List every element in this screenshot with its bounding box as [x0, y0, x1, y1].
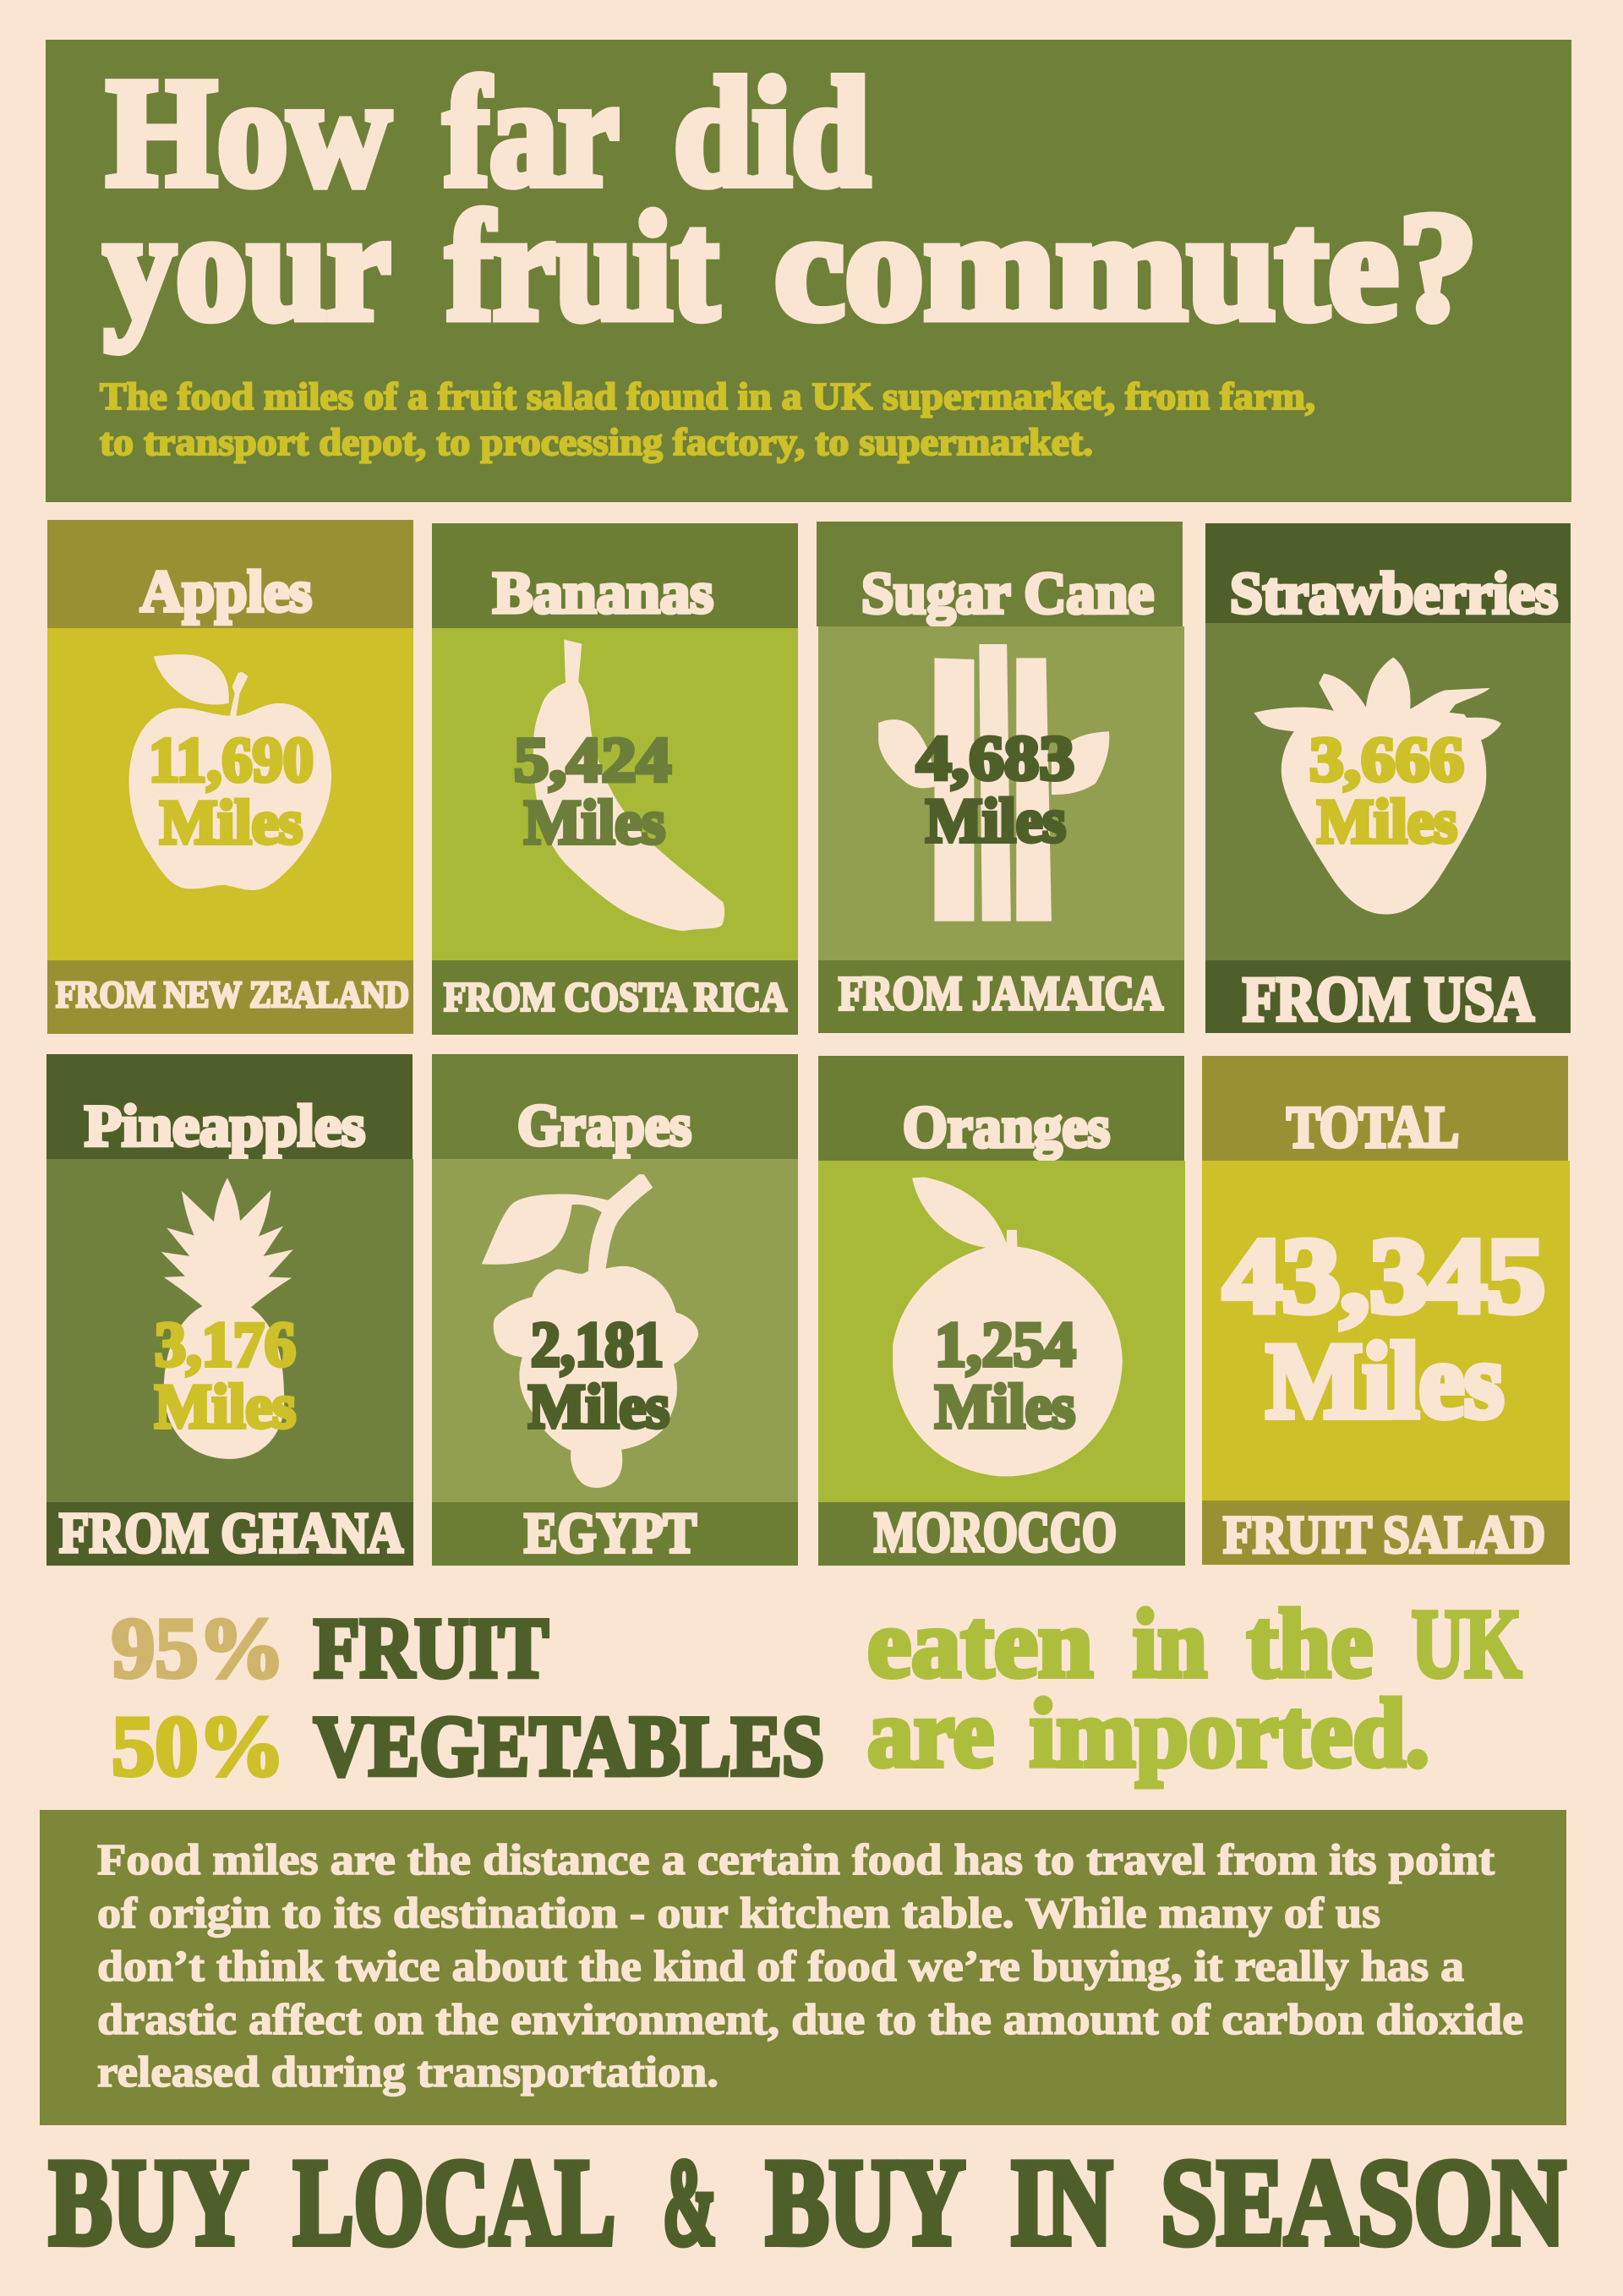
subtitle	[100, 374, 1315, 463]
oranges origin: MOROCCO	[874, 1500, 1117, 1564]
icon: apple	[129, 654, 331, 890]
subtitle: to transport depot, to processing factory, to supermarket.	[100, 420, 1093, 463]
sugar cane heading: Sugar Cane	[861, 561, 1154, 626]
pineapples origin band	[46, 1502, 413, 1566]
strawberries miles value	[1309, 725, 1464, 857]
call to action: LOCAL	[293, 2134, 615, 2271]
subtitle: The food miles of a fruit salad found in a UK supermarket, from farm,	[100, 374, 1315, 418]
pineapples heading band	[46, 1054, 413, 1159]
total miles value	[1223, 1217, 1545, 1440]
sugar cane origin band	[818, 960, 1184, 1033]
panel: total	[1202, 1056, 1570, 1565]
bananas origin band	[432, 960, 798, 1035]
call to action	[49, 2134, 1566, 2271]
apples origin band	[47, 960, 413, 1034]
bananas heading band	[432, 523, 798, 628]
pineapples heading: Pineapples	[85, 1094, 365, 1159]
bananas origin: FROM COSTA RICA	[444, 974, 788, 1020]
icon: banana	[533, 639, 724, 931]
call to action: IN	[1010, 2134, 1112, 2271]
apples miles value: 11,690	[149, 725, 314, 795]
icon: grapes	[482, 1174, 698, 1488]
strawberries origin band	[1205, 960, 1571, 1033]
grapes heading: Grapes	[517, 1094, 691, 1158]
oranges origin band	[818, 1502, 1185, 1566]
total miles value: 43,345	[1223, 1217, 1545, 1336]
strawberries body	[1205, 623, 1571, 960]
strawberries miles value: Miles	[1317, 788, 1457, 857]
total heading band	[1202, 1056, 1568, 1161]
oranges body	[818, 1161, 1185, 1502]
icon: pineapple	[161, 1178, 293, 1459]
statement: eaten in the UK are imported: UK	[1412, 1590, 1522, 1697]
panel: sugar cane	[817, 522, 1184, 1033]
icon: sugar cane	[878, 644, 1109, 921]
total heading: TOTAL	[1287, 1096, 1459, 1160]
grapes miles value: Miles	[528, 1373, 669, 1442]
sugar cane body	[818, 626, 1184, 960]
call to action: &	[663, 2134, 717, 2271]
oranges heading: Oranges	[903, 1096, 1110, 1160]
statement: eaten in the UK are imported: are	[867, 1680, 994, 1787]
grapes origin: EGYPT	[524, 1501, 697, 1565]
grapes miles value	[528, 1310, 669, 1442]
bananas body	[432, 628, 798, 960]
title: commute?	[774, 181, 1478, 352]
explanation text: drastic affect on the environment, due to the amount of carbon dioxide	[97, 1996, 1523, 2044]
panel: pineapples	[46, 1054, 413, 1566]
sugar cane miles value: 4,683	[916, 724, 1074, 794]
grapes miles value: 2,181	[531, 1310, 664, 1380]
panel: oranges	[818, 1056, 1185, 1566]
statistics: imported share	[112, 1590, 1522, 1794]
pineapples miles value: 3,176	[155, 1310, 296, 1380]
label: fruit: FRUIT	[314, 1601, 549, 1696]
grapes origin band	[432, 1502, 798, 1566]
bananas miles value: 5,424	[514, 725, 671, 795]
total origin band	[1202, 1501, 1570, 1565]
bananas miles value: Miles	[524, 788, 665, 857]
sugar cane miles value	[916, 724, 1074, 856]
bananas miles value	[514, 725, 671, 857]
panel: apples	[47, 520, 413, 1034]
title: did	[674, 46, 870, 218]
strawberries miles value: 3,666	[1309, 725, 1464, 795]
bananas heading: Bananas	[493, 561, 713, 626]
sugar cane miles value: Miles	[926, 786, 1066, 856]
pineapples body	[46, 1159, 413, 1502]
pineapples miles value	[155, 1310, 296, 1442]
apples miles value	[149, 725, 314, 857]
apples heading: Apples	[140, 560, 312, 625]
strawberries heading band	[1205, 523, 1571, 623]
oranges miles value: Miles	[935, 1373, 1075, 1442]
strawberries origin: FROM USA	[1243, 965, 1534, 1035]
title: your	[104, 181, 391, 352]
header background	[46, 40, 1571, 502]
grapes heading band	[432, 1054, 798, 1159]
total origin: FRUIT SALAD	[1223, 1505, 1545, 1564]
header panel	[46, 40, 1571, 502]
strawberries heading: Strawberries	[1230, 561, 1558, 626]
call to action: BUY	[766, 2134, 965, 2271]
pineapples miles value: Miles	[155, 1373, 296, 1442]
explanation text: of origin to its destination - our kitchen table. While many of us	[97, 1889, 1380, 1938]
explanation text: released during transportation.	[97, 2048, 719, 2096]
sugar cane origin: FROM JAMAICA	[839, 967, 1163, 1020]
apples body	[47, 628, 413, 960]
title: fruit	[446, 181, 719, 352]
panel: strawberries	[1205, 523, 1571, 1035]
apples heading band	[47, 520, 413, 628]
apples miles value: Miles	[160, 788, 303, 857]
total body	[1202, 1161, 1570, 1501]
title: far	[444, 46, 619, 218]
statement: eaten in the UK are imported: the	[1247, 1590, 1373, 1697]
label: vegetables: VEGETABLES	[314, 1699, 824, 1794]
total miles value: Miles	[1266, 1322, 1504, 1440]
oranges miles value: 1,254	[935, 1310, 1075, 1380]
explanation text: don’t think twice about the kind of food we’re buying, it really has a	[97, 1943, 1464, 1991]
apples origin: FROM NEW ZEALAND	[56, 974, 409, 1015]
statement: eaten in the UK are imported: in	[1133, 1590, 1207, 1697]
pineapples origin: FROM GHANA	[59, 1501, 403, 1565]
grapes body	[432, 1159, 798, 1502]
statement: eaten in the UK are imported: imported.	[1030, 1680, 1429, 1787]
title: How	[107, 46, 391, 218]
sugar cane heading band	[817, 522, 1183, 626]
explanation text	[97, 1836, 1523, 2096]
explanation background	[40, 1810, 1566, 2125]
icon: strawberry	[1254, 658, 1501, 915]
title	[104, 46, 1478, 352]
panel: bananas	[432, 523, 798, 1035]
icon: orange	[893, 1177, 1123, 1476]
statement: eaten in the UK are imported	[867, 1590, 1522, 1787]
statement: eaten in the UK are imported: eaten	[867, 1590, 1093, 1697]
oranges miles value	[935, 1310, 1075, 1442]
panel: grapes	[432, 1054, 798, 1566]
call to action: BUY	[49, 2134, 249, 2271]
oranges heading band	[818, 1056, 1184, 1161]
explanation text: Food miles are the distance a certain food has to travel from its point	[97, 1836, 1495, 1884]
panel: food miles explanation	[40, 1810, 1566, 2125]
stat: 95%: 95%	[112, 1601, 285, 1696]
stat: 50%: 50%	[112, 1699, 285, 1794]
